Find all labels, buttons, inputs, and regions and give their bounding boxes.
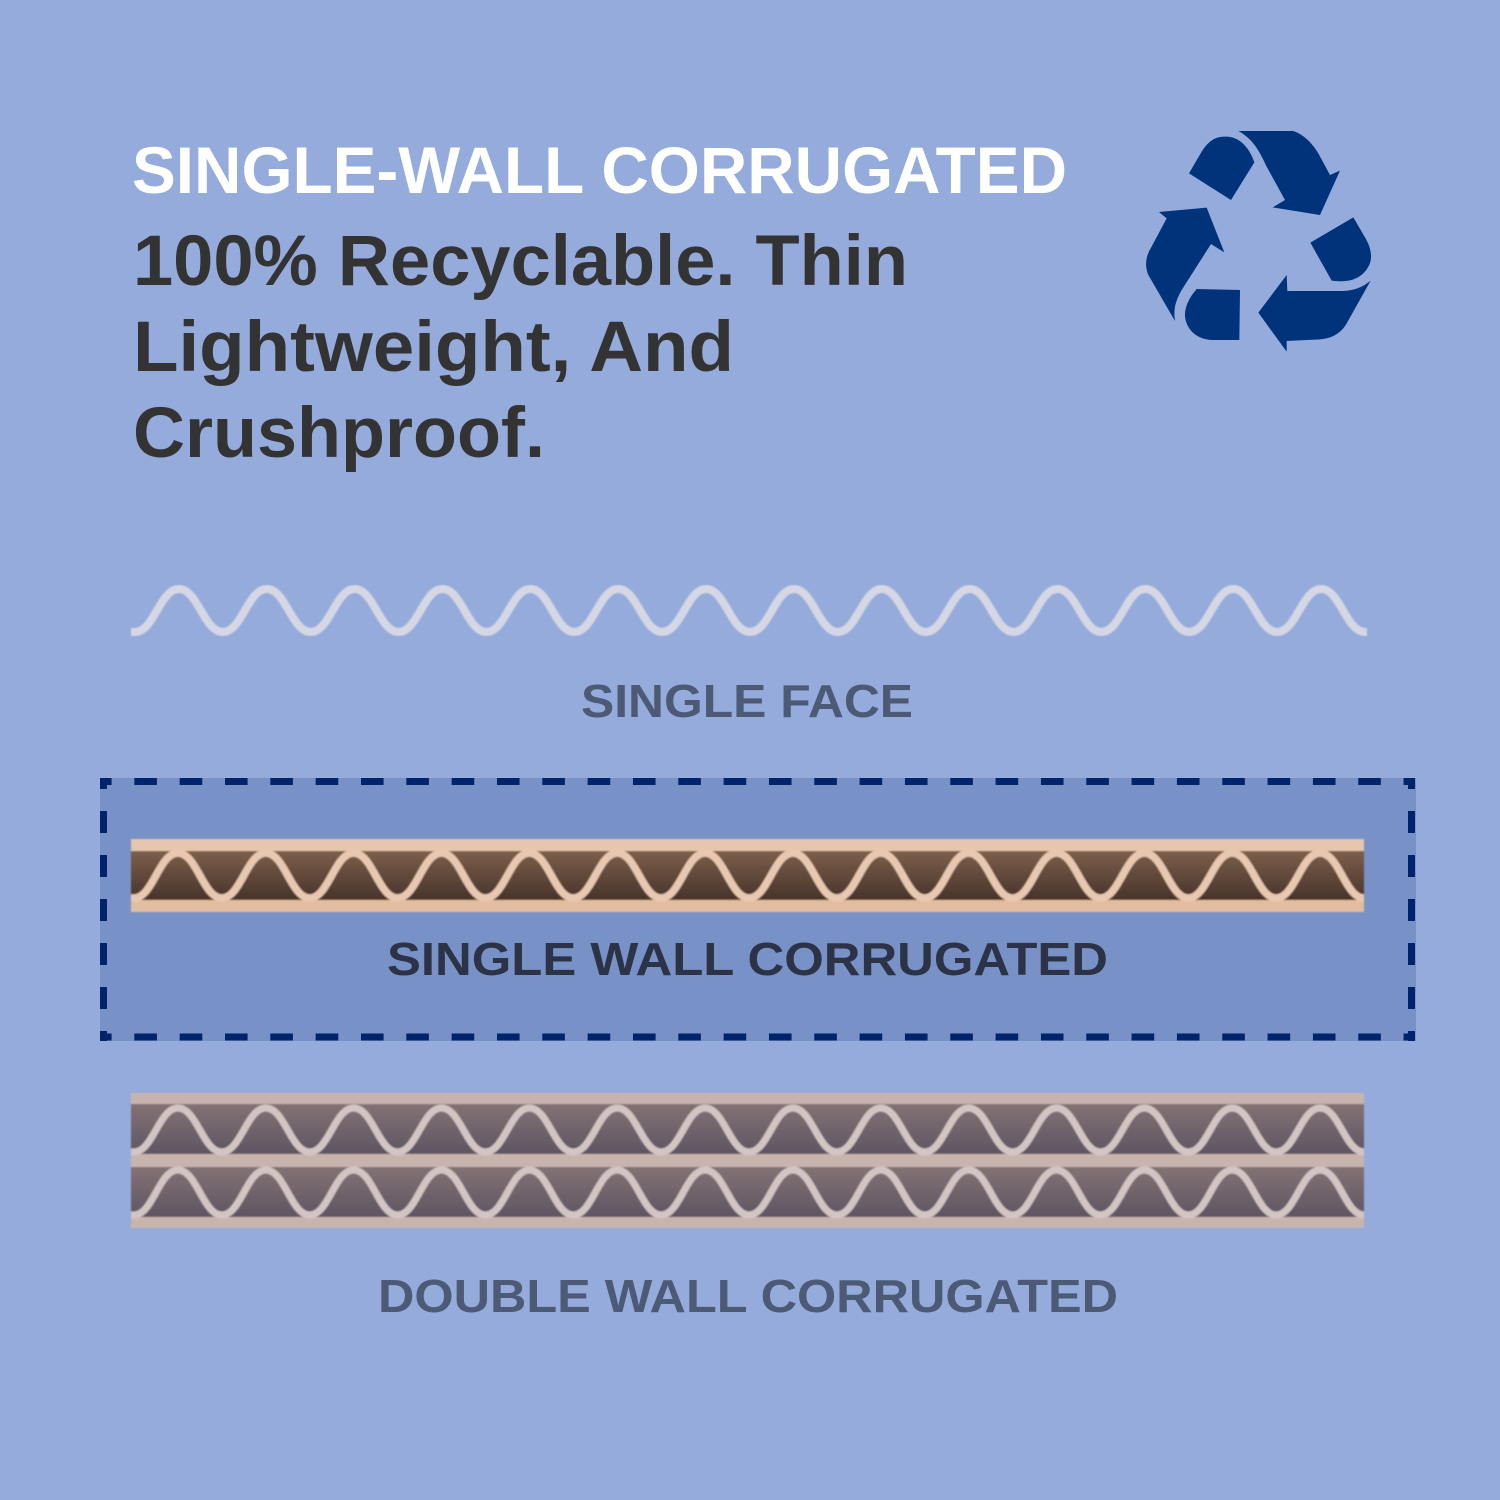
- text block: product description: Crushproof.: [133, 394, 545, 473]
- label: single wall corrugated: SINGLE WALL CORRUGATED: [387, 933, 1108, 985]
- text block: product description: Lightweight, And: [133, 308, 734, 387]
- text block: product description: [133, 222, 908, 473]
- label: double wall corrugated: DOUBLE WALL CORRUGATED: [378, 1270, 1118, 1322]
- icon: recycling symbol: [1146, 131, 1371, 352]
- diagram: single wall board: [131, 839, 1364, 912]
- diagram: single face wave: [131, 589, 1367, 632]
- diagram: double wall board: [131, 1093, 1364, 1228]
- heading: single-wall corrugated: SINGLE-WALL CORRUGATED: [132, 133, 1067, 207]
- label: single face: SINGLE FACE: [581, 675, 913, 727]
- panel: single wall corrugated highlight: [100, 778, 1416, 1041]
- text block: product description: 100% Recyclable. Thin: [133, 222, 908, 301]
